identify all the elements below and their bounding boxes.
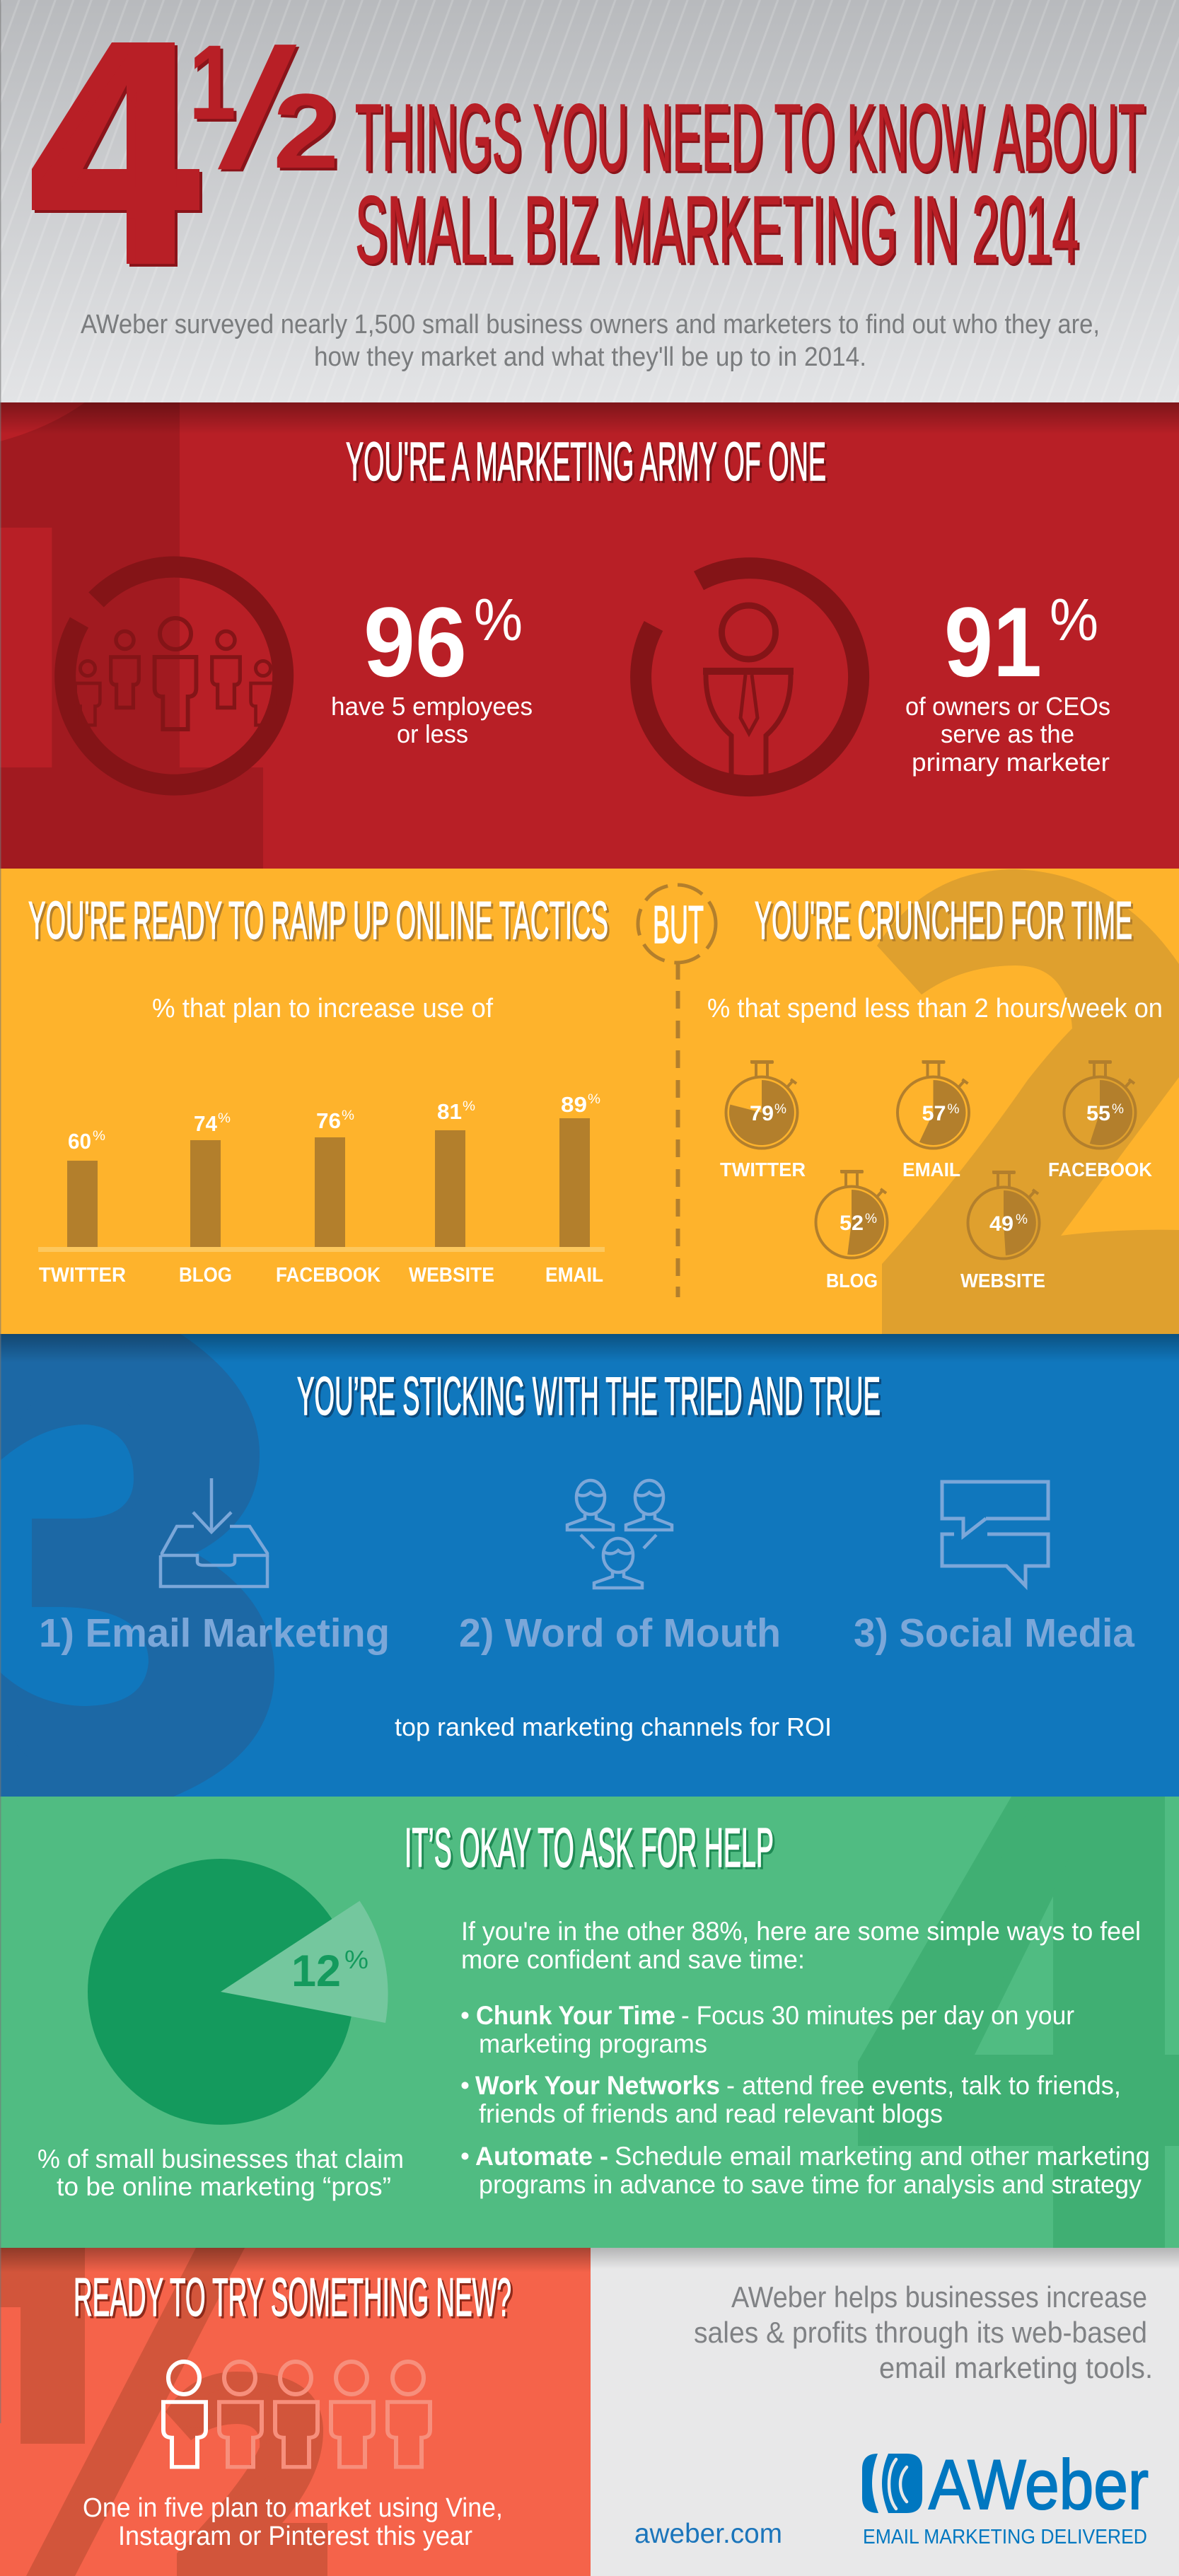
caption: One in five plan to market using Vine, [83,2493,503,2523]
stopwatch: email: % [948,1102,960,1117]
icon: single marketer in ring [641,568,859,786]
logo: aweber: EMAIL MARKETING DELIVERED [863,2526,1147,2548]
subheading: plan to increase: % that plan to increase use of [152,994,493,1023]
panel: section 2 online tactics and time [0,869,1179,1334]
channel labels: 3) Social Media [854,1611,1135,1656]
intro text [81,310,1100,372]
aweber description [694,2280,1153,2384]
title numeral: 4 and a half [32,42,337,267]
bar: website: % [463,1099,475,1114]
stat: 91 percent: 91 [944,586,1042,697]
website link: aweber.com [634,2519,782,2549]
stopwatch: website [960,1171,1045,1292]
pie chart: 12 percent [88,1859,388,2125]
stopwatch: twitter: % [774,1102,786,1117]
bar: email: % [588,1092,600,1107]
bar: twitter: % [93,1129,105,1144]
stopwatch: email [898,1060,969,1180]
intro text: AWeber surveyed nearly 1,500 small business owners and marketers to find out who they are, [81,310,1100,340]
stopwatch: website: WEBSITE [960,1270,1045,1292]
stat: 91 percent: of owners or CEOs [905,692,1110,721]
logo: aweber [862,2445,1149,2548]
stopwatch: twitter [720,1060,806,1180]
icon: inbox [161,1478,267,1586]
stopwatch: blog: % [865,1212,877,1226]
title numeral: 4 and a half: 1 [192,25,239,144]
caption [83,2493,503,2551]
heading: ramp up online tactics: YOU'RE READY TO RAMP UP ONLINE TACTICS [28,890,608,950]
title numeral: 4 and a half: 1 [189,23,236,141]
tip: chunk your time: - Focus 30 minutes per day on your [681,2001,1074,2030]
panel: half section try something new [0,2248,591,2576]
tip: automate [460,2142,1150,2199]
subheading: spend less than 2 hours: % that spend less than 2 hours/week on [707,994,1163,1023]
tip: chunk your time: • [460,2001,470,2030]
bar: facebook: 76 [316,1108,341,1133]
heading [297,1367,883,1429]
stat: 91 percent: serve as the [941,719,1074,748]
tip: automate: Schedule email marketing and other marketing [615,2142,1150,2171]
tip: work your networks: Work Your Networks [475,2071,720,2100]
heading: ramp up online tactics [28,890,610,952]
heading [405,1816,776,1881]
tip: chunk your time: Chunk Your Time [476,2001,675,2030]
bar: blog: BLOG [179,1264,232,1287]
tip: automate: programs in advance to save time for analysis and strategy [479,2170,1142,2199]
bar chart [38,1092,605,1287]
tip: work your networks: friends of friends and read relevant blogs [479,2099,943,2128]
caption: Instagram or Pinterest this year [118,2522,472,2551]
intro text: how they market and what they'll be up to in 2014. [314,342,866,372]
bar: website [409,1099,494,1287]
tip: work your networks [460,2071,1121,2128]
stat: 96 percent: 96 [364,586,467,697]
pie caption [37,2145,404,2201]
panel: half section try something new: READY TO TRY SOMETHING NEW? [76,2270,513,2330]
tip: automate: Automate - [475,2142,608,2171]
stopwatch: facebook [1048,1060,1152,1180]
stopwatch: facebook: 55 [1086,1102,1110,1125]
ghost numeral one half [0,2248,327,2576]
pie caption: % of small businesses that claim [37,2145,404,2174]
icon: speech bubbles [942,1482,1048,1586]
stopwatch: website: % [1016,1212,1028,1227]
panel: section 3 tried and true [0,1334,1179,1797]
bar: website: 81 [437,1099,462,1124]
tip: chunk your time [460,2001,1074,2058]
icon: team of five in ring [65,567,283,785]
badge: but: BUT [653,895,704,954]
tip: work your networks: • [460,2071,470,2100]
icon: word of mouth people [567,1480,672,1588]
bar: email: EMAIL [545,1264,603,1287]
stopwatch: blog: BLOG [826,1270,878,1292]
pie chart: 12 percent: 12 [291,1946,341,1996]
ghost numeral one half: 2 [175,2343,325,2576]
bar: facebook [276,1108,381,1287]
bar: website: WEBSITE [409,1264,494,1287]
stat: 91 percent: % [1050,586,1098,653]
stopwatch: email: 57 [922,1102,946,1125]
bar: twitter [39,1129,126,1287]
stopwatch: website: 49 [989,1212,1014,1236]
stopwatch: twitter: TWITTER [720,1159,806,1180]
panel: section 1 marketing army of one [0,402,1179,869]
tip: automate: • [460,2142,470,2171]
ghost numeral 4 [858,1797,1179,2248]
channel labels [39,1611,1135,1656]
logo: aweber: AWeber [929,2445,1149,2524]
stat: 96 percent: % [474,586,523,653]
tips intro: If you're in the other 88%, here are some simple ways to feel [461,1917,1141,1946]
channel labels: 2) Word of Mouth [459,1611,781,1656]
stat: 91 percent: primary marketer [912,748,1110,777]
title numeral: 4 and a half: 2 [273,71,339,190]
stat: 96 percent: have 5 employees [331,692,533,721]
heading [346,431,828,494]
badge: but [638,885,716,963]
panel: half section try something new: READY TO TRY SOMETHING NEW? [74,2268,511,2328]
stat: 91 percent [905,586,1110,777]
stopwatch: twitter: 79 [750,1102,774,1125]
panel: section 4 ask for help: IT’S OKAY TO ASK FOR HELP [405,1816,774,1879]
ghost numeral 2 [877,869,1179,1334]
stat: 96 percent: or less [397,719,468,748]
stat: 96 percent [331,586,533,748]
panel: aweber footer [591,2248,1179,2576]
tip: chunk your time: marketing programs [479,2029,707,2058]
stopwatch: blog [816,1170,887,1292]
icon: one in five people [163,2362,430,2467]
ghost numeral 1 [0,402,263,869]
channel labels: 1) Email Marketing [39,1611,390,1656]
bar: blog [179,1111,232,1287]
title numeral: 4 and a half: / [218,14,298,204]
bar: email [545,1092,603,1287]
stopwatch: facebook: FACEBOOK [1048,1159,1152,1180]
tips intro: more confident and save time: [461,1945,805,1974]
bar: facebook: FACEBOOK [276,1264,381,1287]
title numeral: 4 and a half: 4 [34,0,212,327]
caption: top ranked marketing channels for ROI [395,1712,832,1741]
tip: work your networks: - attend free events, talk to friends, [726,2071,1121,2100]
stopwatch: blog: 52 [840,1212,864,1235]
bar: facebook: % [342,1108,354,1123]
bar: twitter: TWITTER [39,1264,126,1287]
ghost numeral 3 [0,1334,274,1797]
tips intro [461,1917,1141,1974]
heading [74,2268,513,2330]
bar: blog: 74 [194,1111,218,1136]
title text [355,84,1147,285]
bar: twitter: 60 [68,1129,91,1154]
panel: section 4 ask for help [0,1797,1179,2248]
stopwatch: email: EMAIL [902,1159,960,1180]
bar: blog: % [218,1111,231,1126]
bar: email: 89 [561,1092,587,1117]
aweber description: email marketing tools. [879,2351,1153,2384]
pie caption: to be online marketing “pros” [57,2172,391,2201]
stopwatch: facebook: % [1112,1102,1124,1117]
panel: section 4 ask for help: IT’S OKAY TO ASK FOR HELP [407,1818,776,1881]
pie chart: 12 percent: % [344,1945,368,1974]
title numeral: 4 and a half: / [221,16,301,207]
aweber description: sales & profits through its web-based [694,2316,1147,2349]
title numeral: 4 and a half: 2 [276,74,342,193]
panel: header [0,0,1179,402]
